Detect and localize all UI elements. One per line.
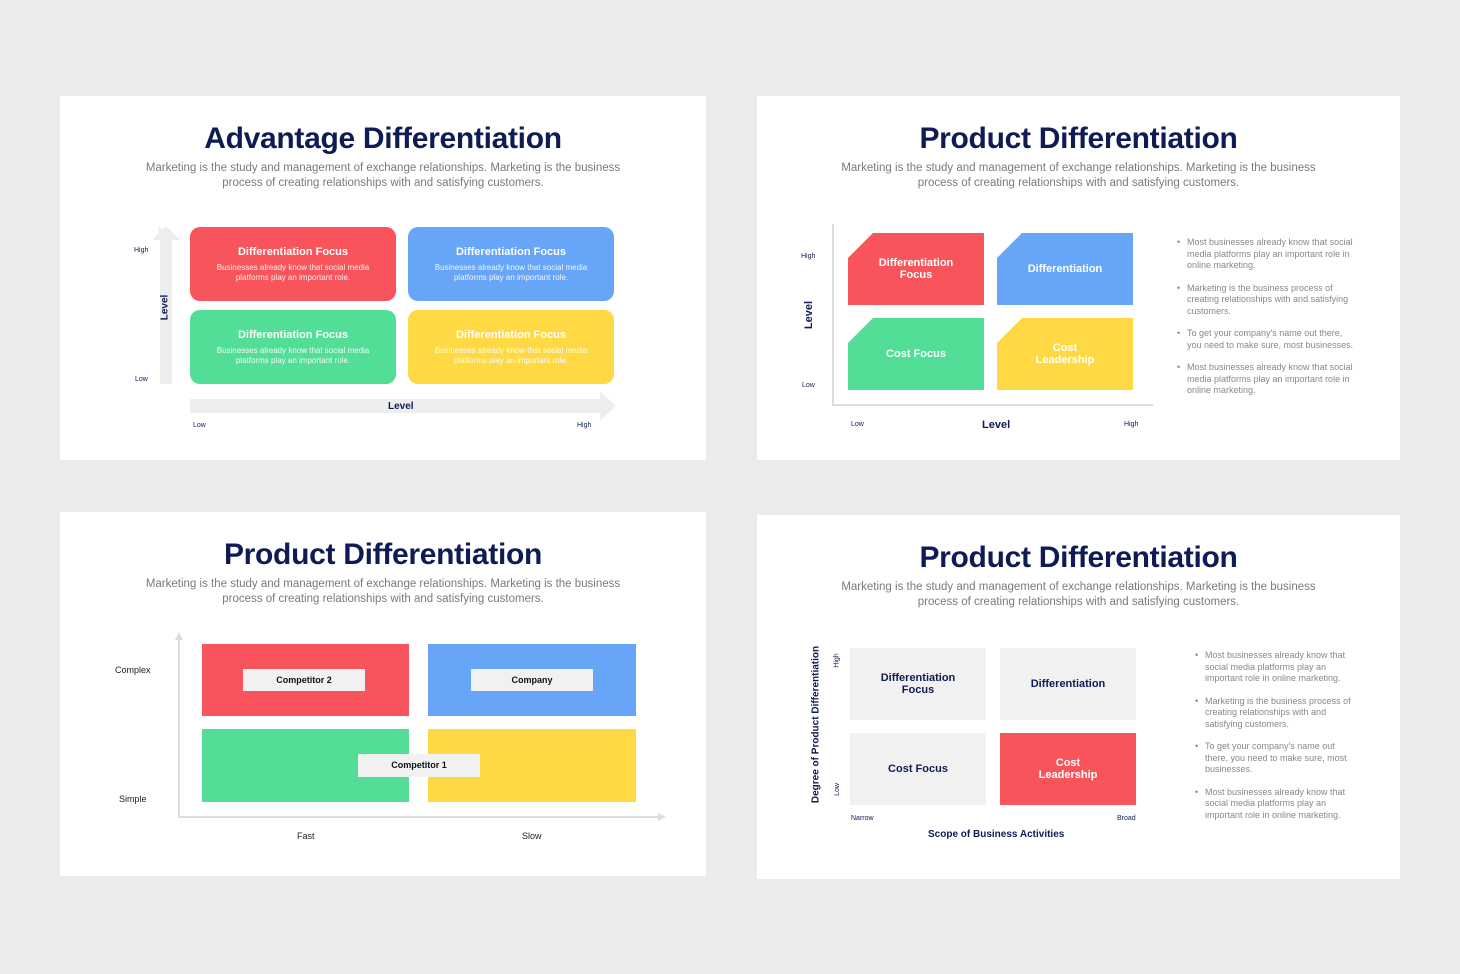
box yellow: Leadership (1036, 354, 1094, 366)
bullets (1195, 650, 1351, 820)
title: Advantage Differentiation (204, 122, 562, 155)
box: green: Differentiation Focus (238, 328, 348, 340)
subtitle (841, 162, 1316, 189)
box red: Differentiation (879, 257, 953, 269)
box: cost leadership: Leadership (1039, 769, 1097, 781)
box yellow (997, 318, 1133, 390)
box: yellow: platforms play an important role. (454, 356, 568, 364)
box red (848, 233, 984, 305)
box: differentiation (1000, 648, 1136, 720)
subtitle (146, 578, 620, 605)
box: cost focus (850, 733, 986, 805)
box: yellow: Businesses already know that social media (435, 346, 587, 354)
subtitle: Marketing is the study and management of exchange relationships. Marketing is the business (841, 162, 1316, 174)
subtitle: Marketing is the study and management of exchange relationships. Marketing is the business (146, 578, 620, 590)
simple label: Simple (119, 794, 147, 804)
subtitle (146, 162, 620, 189)
bullets: Marketing is the business process of creating relationships with and satisfying customers. (1187, 282, 1348, 316)
x axis label: Level (388, 401, 414, 412)
x axis title: Scope of Business Activities (928, 829, 1064, 840)
green box (202, 729, 409, 802)
subtitle: Marketing is the study and management of exchange relationships. Marketing is the business (841, 581, 1316, 593)
high x: High (1124, 421, 1138, 428)
box: differentiation focus: Focus (902, 684, 934, 696)
box: red: Businesses already know that social media (217, 262, 369, 272)
panel: product differentiation 1 (757, 96, 1400, 460)
box: blue: Differentiation Focus (456, 246, 566, 258)
high label: High (801, 253, 815, 260)
x labels: Low (851, 421, 864, 428)
low x: Low (193, 422, 206, 429)
complex label: Complex (115, 665, 151, 675)
x axis title: Level (982, 419, 1010, 431)
subtitle: process of creating relationships with and satisfying customers. (918, 177, 1239, 189)
box green (848, 318, 984, 390)
box: red (190, 227, 396, 301)
box: red: Differentiation Focus (238, 246, 348, 258)
title: Product Differentiation (919, 122, 1238, 155)
box: cost leadership: Cost (1056, 757, 1080, 769)
box blue (997, 233, 1133, 305)
box: red: platforms play an important role. (236, 272, 350, 282)
high label: High (134, 247, 148, 254)
vertical axis arrow (154, 226, 180, 384)
box: green (190, 310, 396, 384)
box: yellow (408, 310, 614, 384)
subtitle: process of creating relationships with and satisfying customers. (918, 596, 1239, 608)
box: green: platforms play an important role. (236, 356, 350, 364)
box: differentiation focus (850, 648, 986, 720)
panel: advantage differentiation (60, 96, 706, 460)
box: blue: Businesses already know that social media (435, 262, 587, 272)
box: differentiation: Differentiation (1031, 678, 1105, 690)
box: green: Businesses already know that social media (217, 346, 369, 354)
broad: Broad (1117, 815, 1136, 822)
bullets (1177, 237, 1353, 395)
bullets: Marketing is the business process of creating relationships with and satisfying customers. (1205, 696, 1351, 728)
narrow: Narrow (851, 815, 874, 822)
box: differentiation focus: Differentiation (881, 672, 955, 684)
fast: Fast (297, 831, 315, 841)
bullets: Most businesses already know that social media platforms play an important role in online marketing. (1187, 362, 1353, 395)
box blue: Differentiation (1028, 263, 1102, 275)
yellow box (428, 729, 636, 802)
label: company: Company (511, 675, 552, 685)
bullets: To get your company's name out there, you need to make sure, most businesses. (1187, 328, 1353, 350)
bullets: To get your company's name out there, you need to make sure, most businesses. (1205, 741, 1347, 774)
panel: product differentiation scope (757, 515, 1400, 879)
high: High (834, 653, 841, 668)
box yellow: Cost (1053, 342, 1077, 354)
subtitle (841, 581, 1316, 608)
box green: Cost Focus (886, 348, 946, 360)
high x: High (577, 422, 591, 429)
bullets: Most businesses already know that social media platforms play an important role in online marketing. (1205, 786, 1345, 820)
box: cost leadership (1000, 733, 1136, 805)
bullets: Most businesses already know that social media platforms play an important role in online marketing. (1187, 237, 1353, 270)
label: company (471, 669, 593, 691)
low: Low (834, 783, 841, 796)
subtitle: process of creating relationships with and satisfying customers. (222, 177, 544, 189)
y axis label: Level (159, 295, 170, 320)
label: competitor 1: Competitor 1 (391, 760, 447, 770)
axes (175, 632, 666, 821)
box red: Focus (900, 269, 932, 281)
label: competitor 2: Competitor 2 (276, 675, 332, 685)
label: competitor 1 (358, 754, 480, 777)
title: Product Differentiation (224, 538, 542, 571)
axes (832, 224, 1153, 406)
box: blue (408, 227, 614, 301)
subtitle: Marketing is the study and management of exchange relationships. Marketing is the business (146, 162, 620, 174)
slow: Slow (522, 831, 542, 841)
red box (202, 644, 409, 716)
bullets: Most businesses already know that social media platforms play an important role in online marketing. (1205, 650, 1345, 683)
panel: product differentiation competitors (60, 512, 706, 876)
subtitle: process of creating relationships with and satisfying customers. (222, 593, 544, 605)
title: Product Differentiation (919, 541, 1238, 574)
low label: Low (135, 376, 148, 383)
horizontal axis arrow (190, 391, 616, 421)
box: yellow: Differentiation Focus (456, 328, 566, 340)
box: blue: platforms play an important role. (454, 272, 568, 282)
y axis title: Degree of Product Differentiation (810, 646, 822, 803)
low label: Low (802, 382, 815, 389)
box: cost focus: Cost Focus (888, 763, 948, 775)
blue box (428, 644, 636, 716)
label: competitor 2 (243, 669, 365, 691)
y label: Level (803, 301, 815, 329)
